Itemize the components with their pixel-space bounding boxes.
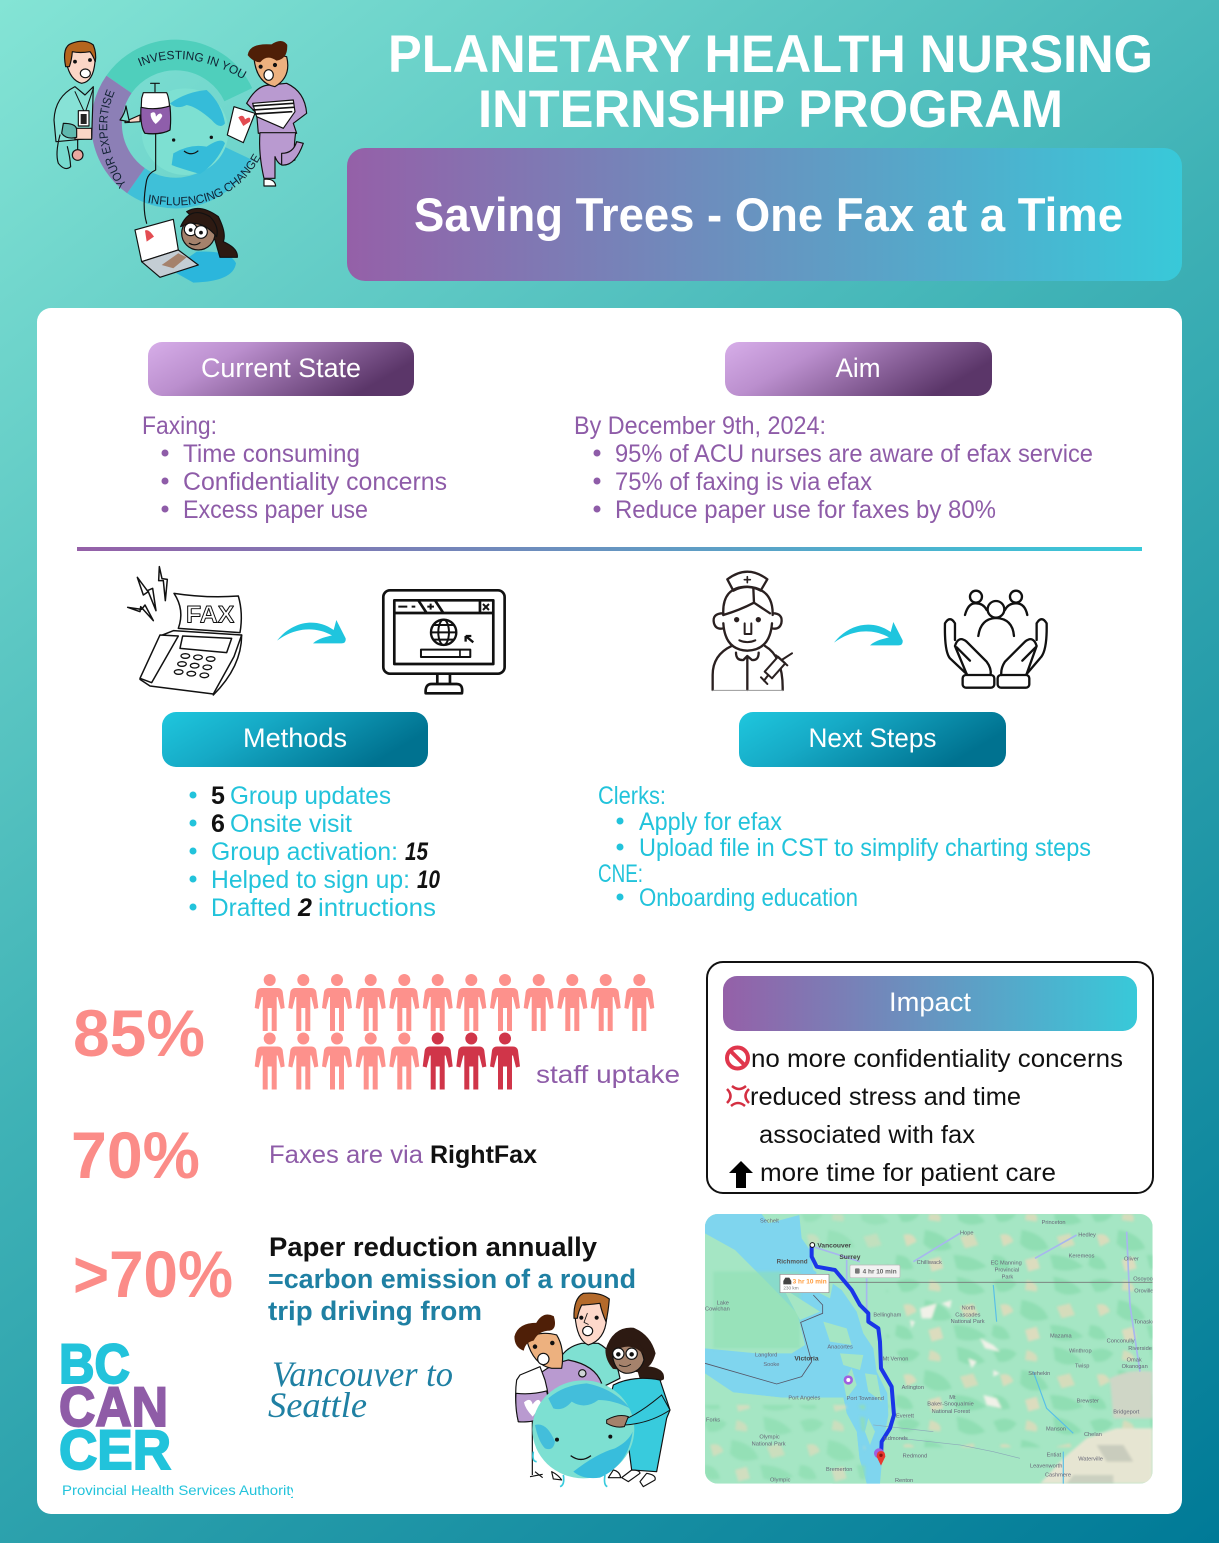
duration callouts: 3 hr 10 min	[793, 1279, 827, 1285]
list: methods completed: intructions	[318, 894, 436, 922]
icon: up arrow	[729, 1161, 753, 1188]
nurse with faxes	[227, 42, 307, 186]
duration callouts	[780, 1265, 900, 1293]
map: Vancouver to Seattle route	[705, 1214, 1157, 1484]
stat: 70% via RightFax	[71, 1118, 537, 1192]
map labels: Renton	[895, 1478, 913, 1484]
map labels: Keremeos	[1069, 1254, 1095, 1260]
stat: 70% via RightFax: RightFax	[430, 1141, 537, 1169]
map labels: Cowichan	[705, 1306, 730, 1312]
map labels: Chelan	[1084, 1432, 1102, 1438]
stat: 70% via RightFax: Faxes are via	[269, 1141, 423, 1169]
map labels: Sechelt	[760, 1218, 779, 1224]
icon: anger mark	[727, 1086, 749, 1106]
main white panel	[37, 308, 1182, 1514]
list: next steps by role: Onboarding education	[639, 884, 858, 912]
ring	[107, 55, 238, 193]
icon: prohibited sign	[727, 1048, 748, 1068]
list: faxing problems: Time consuming	[183, 440, 360, 468]
subtitle banner: Saving Trees - One Fax at a Time	[414, 188, 1123, 241]
title: PLANETARY HEALTH NURSING	[388, 25, 1153, 84]
pictogram: staff figures	[255, 974, 654, 1090]
map labels: Sooke	[763, 1362, 779, 1368]
map labels: Conconully	[1107, 1338, 1135, 1344]
title	[388, 25, 1153, 139]
map labels: National Forest	[932, 1409, 970, 1415]
map labels: Leavenworth	[1030, 1464, 1062, 1470]
IV bag	[141, 83, 171, 223]
heading: methods	[162, 712, 428, 767]
man in teal scrubs	[560, 1293, 621, 1478]
list: aim targets: 75% of faxing is via efax	[615, 468, 872, 496]
list: aim targets: 95% of ACU nurses are aware of efax service	[615, 440, 1093, 468]
list: methods completed: 10	[417, 866, 440, 894]
panel: impact: associated with fax	[759, 1121, 976, 1149]
stat: 70% via RightFax: 70%	[71, 1118, 200, 1192]
stat: over 70% paper reduction: trip driving from	[268, 1296, 482, 1326]
map labels: Langford	[755, 1353, 777, 1359]
map labels: Baker-Snoqualmie	[927, 1401, 974, 1407]
nurse in purple scrubs	[515, 1315, 602, 1480]
nurse in blue scrubs	[606, 1328, 670, 1487]
map labels: Mt Vernon	[883, 1357, 908, 1363]
map labels: Stehekin	[1028, 1371, 1050, 1377]
icon: fax machine	[128, 567, 242, 695]
list: methods completed: Group updates	[230, 782, 391, 810]
list: next steps by role: CNE:	[598, 860, 643, 888]
globe	[532, 1380, 670, 1487]
panel: next steps	[598, 712, 1091, 912]
Vancouver Island and coast land	[705, 1233, 805, 1353]
map labels: Everett	[896, 1414, 914, 1420]
subtitle banner	[347, 148, 1182, 281]
map labels: Park	[1002, 1274, 1013, 1280]
logo: BC Cancer: Provincial Health Services Authority	[62, 1483, 298, 1498]
map labels: Anacortes	[827, 1344, 853, 1350]
map labels: Hope	[960, 1230, 974, 1236]
rivers and highways	[813, 1232, 1140, 1372]
borders	[829, 1282, 1152, 1283]
ring captions: INVESTING IN YOU	[138, 50, 246, 78]
list: faxing problems: Excess paper use	[183, 496, 368, 524]
heading: next steps	[739, 712, 1006, 767]
map labels: Bridgeport	[1113, 1410, 1140, 1416]
list: methods completed: 15	[405, 838, 429, 866]
list: methods completed: Helped to sign up:	[211, 866, 410, 894]
list: aim targets: By December 9th, 2024:	[574, 412, 826, 440]
heading: current state	[148, 342, 414, 396]
map labels: Edmonds	[884, 1436, 908, 1442]
water	[705, 1214, 888, 1484]
map labels: Redmond	[903, 1453, 927, 1459]
arrow: nurses to community	[834, 622, 903, 645]
map labels: Richmond	[777, 1259, 808, 1266]
list: methods completed: 5	[211, 782, 225, 810]
map labels: Hedley	[1078, 1233, 1096, 1239]
map labels: Forks	[706, 1418, 720, 1424]
map labels	[705, 1218, 1157, 1484]
nurse with stethoscope	[54, 41, 140, 169]
map labels: Cashmere	[1045, 1473, 1071, 1479]
list: faxing problems	[142, 412, 447, 524]
map labels: Bellingham	[873, 1313, 902, 1319]
nurse at laptop	[135, 208, 237, 283]
logo: BC Cancer: CAN	[59, 1375, 168, 1438]
icon: hands holding people	[945, 591, 1047, 688]
map labels: Omak	[1127, 1358, 1142, 1364]
map labels: National Park	[752, 1442, 786, 1448]
panel: impact: more time for patient care	[760, 1159, 1056, 1187]
ring captions	[98, 50, 260, 206]
list: methods completed: 2	[297, 894, 312, 922]
script text: Vancouver to Seattle: Vancouver to	[272, 1354, 453, 1394]
heading: impact: Impact	[889, 987, 971, 1017]
list: faxing problems: Confidentiality concerns	[183, 468, 447, 496]
panel: impact: no more confidentiality concerns	[751, 1045, 1123, 1073]
globe	[142, 88, 228, 175]
map labels: Port Angeles	[788, 1395, 821, 1401]
stat: over 70% paper reduction: Paper reduction annually	[269, 1232, 597, 1262]
list: methods completed: 6	[211, 810, 225, 838]
heading: aim	[725, 342, 992, 396]
title: INTERNSHIP PROGRAM	[478, 80, 1063, 139]
panel: methods	[162, 712, 440, 922]
heading: current state: Current State	[201, 353, 361, 383]
map labels: Princeton	[1042, 1220, 1066, 1226]
list: aim targets	[574, 412, 1093, 524]
map labels: Okanogan	[1122, 1364, 1148, 1370]
stat: 85% staff uptake: staff uptake	[536, 1061, 680, 1089]
map labels: Waterville	[1078, 1457, 1103, 1463]
heading: impact	[723, 976, 1137, 1031]
stat: over 70% paper reduction: >70%	[73, 1237, 233, 1311]
arrow: fax to efax	[277, 620, 346, 643]
map labels: Chilliwack	[917, 1260, 942, 1266]
list: next steps by role: Clerks:	[598, 782, 666, 810]
map labels: North	[962, 1306, 975, 1312]
stat: 85% staff uptake: 85%	[73, 996, 205, 1070]
map labels: Manson	[1046, 1426, 1066, 1432]
list: next steps by role: Apply for efax	[639, 808, 782, 836]
duration callouts: 4 hr 10 min	[863, 1269, 897, 1275]
map labels: Olympic	[770, 1477, 791, 1483]
map labels: Port Townsend	[847, 1396, 884, 1402]
illustration: nurses hugging the globe	[515, 1293, 670, 1487]
map labels: Entiat	[1047, 1453, 1062, 1459]
map labels: Cascades	[955, 1313, 981, 1319]
map labels: Olympic	[759, 1434, 780, 1440]
IV pole	[530, 1422, 543, 1478]
map labels: Oliver	[1124, 1257, 1139, 1263]
script text: Vancouver to Seattle	[268, 1354, 453, 1425]
heading: methods: Methods	[243, 723, 347, 753]
map labels: Lake	[717, 1300, 729, 1306]
panel: impact	[707, 962, 1153, 1193]
icon: nurse with syringe	[713, 572, 792, 690]
heading: aim: Aim	[836, 353, 880, 383]
map labels: Arlington	[902, 1385, 924, 1391]
illustration: program ring logo with three nurses	[53, 40, 308, 283]
list: aim targets: Reduce paper use for faxes by 80%	[615, 496, 996, 524]
list: methods completed: Drafted	[211, 894, 291, 922]
ring captions: INFLUENCING CHANGE	[148, 154, 260, 206]
duration callouts: 230 km	[783, 1286, 799, 1291]
panel: impact: reduced stress and time	[750, 1083, 1021, 1111]
panel: current state	[142, 342, 447, 524]
map labels: Mazama	[1050, 1334, 1073, 1340]
list: faxing problems: Faxing:	[142, 412, 217, 440]
logo: BC Cancer: CER	[59, 1418, 171, 1481]
map labels: Brewster	[1077, 1399, 1099, 1405]
map labels: Vancouver	[817, 1242, 851, 1249]
map labels: Mt	[949, 1395, 956, 1401]
map labels: Osoyoos	[1133, 1276, 1156, 1282]
map labels: Twisp	[1075, 1363, 1089, 1369]
heading: next steps: Next Steps	[808, 723, 936, 753]
map labels: Winthrop	[1069, 1349, 1092, 1355]
map labels: Riverside	[1128, 1346, 1152, 1352]
icon: fax machine: FAX	[186, 602, 234, 629]
location pins	[844, 1375, 885, 1466]
list: next steps by role	[598, 782, 1091, 912]
list: methods completed: Group activation:	[211, 838, 398, 866]
land base	[705, 1214, 1153, 1484]
mottled terrain	[800, 1214, 1153, 1484]
map labels: National Park	[951, 1319, 985, 1325]
logo: BC Cancer: BC	[59, 1332, 130, 1395]
stat: 85% staff uptake	[73, 974, 680, 1090]
ring captions: YOUR EXPERTISE	[98, 89, 125, 189]
map labels: Tonasket	[1134, 1319, 1157, 1325]
list: methods completed: Onsite visit	[230, 810, 352, 838]
map labels: Oroville	[1134, 1289, 1153, 1295]
stat: over 70% paper reduction	[73, 1232, 636, 1326]
route line	[812, 1246, 894, 1458]
script text: Vancouver to Seattle: Seattle	[268, 1385, 367, 1425]
list: methods completed	[190, 782, 440, 922]
map labels: Victoria	[794, 1355, 819, 1362]
map labels: EC Manning	[991, 1260, 1022, 1266]
list: next steps by role: Upload file in CST to simplify charting steps	[639, 834, 1091, 862]
stat: over 70% paper reduction: =carbon emission of a round	[268, 1264, 636, 1294]
logo: BC Cancer	[59, 1332, 298, 1498]
map labels: Bremerton	[826, 1467, 852, 1473]
icon: computer monitor	[383, 590, 505, 693]
map labels: Surrey	[839, 1254, 861, 1261]
panel: aim	[574, 342, 1093, 524]
map labels: Provincial	[995, 1268, 1019, 1274]
